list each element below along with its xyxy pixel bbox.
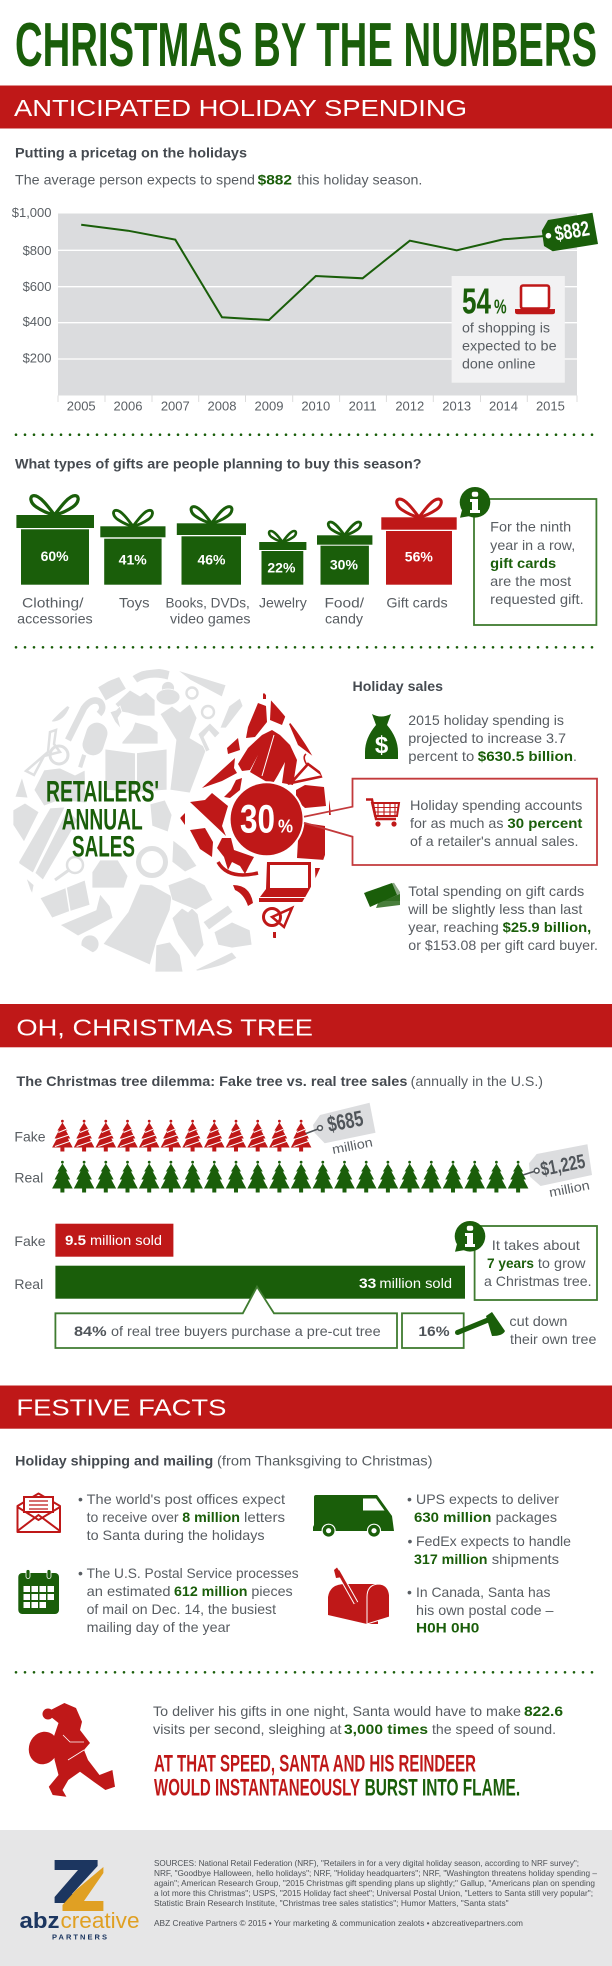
fact: USPS busiest day: mailing day of the year <box>87 1619 231 1635</box>
callout: gift cards most requested: For the ninth <box>490 519 571 535</box>
callout: gift cards most requested <box>460 487 596 625</box>
fact: holiday spending projection: 2015 holiday spending is <box>408 712 564 728</box>
gift: clothing 60%: 60% <box>41 548 69 564</box>
pictogram: fake tree sales: Fake <box>14 1128 46 1144</box>
logo: abz creative partners: abz <box>20 1908 60 1933</box>
gift labels: Toys <box>119 594 150 610</box>
fact: Santa's postal code: In Canada, Santa has <box>416 1584 550 1600</box>
price tag: $685 million: million <box>331 1134 374 1157</box>
fact: UPS and FedEx: 317 million <box>414 1551 488 1567</box>
section header: festive facts: FESTIVE FACTS <box>16 1394 226 1420</box>
gift: gift cards 56% <box>381 499 457 585</box>
subheading: gift types: What types of gifts are people planning to buy this season? <box>15 456 422 472</box>
callout: 7 years to grow <box>455 1221 597 1300</box>
subheading: tree dilemma: The Christmas tree dilemma: Fake tree vs. real tree sales <box>16 1074 407 1089</box>
callout: 7 years to grow: a Christmas tree. <box>484 1273 592 1289</box>
icon: shopping cart <box>366 800 399 827</box>
fact: letters to Santa: letters <box>244 1509 285 1525</box>
callout: 30 percent of annual sales <box>304 779 597 865</box>
gift labels: Food/ <box>324 594 364 610</box>
sources: NRF, "Goodbye Halloween, hello holidays"; NRF, "Holiday headquarters"; NRF, "Washington threatens holiday spending – <box>154 1868 597 1878</box>
sources: a lot more this Christmas"; USPS, "2015 Holiday fact sheet"; Universal Postal Union, "Letters to Santa still very popular"; <box>154 1888 593 1898</box>
callout: 54% online shopping <box>452 276 565 383</box>
callout: 84% pre-cut: of real tree buyers purchase a pre-cut tree <box>111 1323 381 1339</box>
fact: gift card spending <box>364 883 598 953</box>
section header: anticipated holiday spending <box>0 86 612 128</box>
y axis labels: $800 <box>23 243 52 258</box>
logo: abz creative partners: creative <box>60 1908 140 1933</box>
subheading: holiday shipping: Holiday shipping and mailing <box>15 1453 213 1468</box>
fact: letters to Santa: • <box>78 1491 83 1507</box>
icon: money bag: $ <box>375 732 389 759</box>
footer <box>0 1830 612 1966</box>
gift chart <box>16 496 457 626</box>
gift: clothing 60% <box>16 496 94 585</box>
gift labels: candy <box>325 610 363 626</box>
callout: 54% online shopping: % <box>494 296 507 318</box>
circle graphic: retailers' annual sales <box>13 668 331 974</box>
y axis labels: $1,000 <box>12 205 52 220</box>
x axis labels: 2012 <box>395 399 424 414</box>
bar: fake trees: Fake <box>14 1233 46 1249</box>
subheading: holiday sales: Holiday sales <box>352 679 443 694</box>
callout: gift cards most requested: requested gift. <box>490 591 584 607</box>
green trees <box>52 1161 528 1192</box>
heading: retailers' annual sales: SALES <box>72 831 135 864</box>
section header: oh, christmas tree <box>0 1004 612 1047</box>
gift: gift cards 56%: 56% <box>405 549 433 565</box>
30% badge: 30 <box>240 798 275 842</box>
x axis labels <box>67 399 565 414</box>
callout: 54% online shopping: 54 <box>462 280 491 321</box>
x axis labels: 2009 <box>255 399 283 414</box>
gift: jewelry 22%: 22% <box>267 560 296 576</box>
text: average spend <box>15 172 422 188</box>
gift: books 46% <box>177 507 246 585</box>
price tag: $882 <box>542 213 598 251</box>
icon: calendar <box>18 1570 59 1614</box>
sources <box>154 1858 597 1908</box>
bar: real trees: million sold <box>379 1275 452 1291</box>
icon: info bubble <box>460 487 490 518</box>
shoe <box>296 785 326 808</box>
subheading: pricetag: Putting a pricetag on the holidays <box>15 146 247 160</box>
gift: books 46%: 46% <box>197 552 226 568</box>
fact: USPS busiest day: The U.S. Postal Service processes <box>87 1565 299 1581</box>
callout: 16% cut down: cut down <box>509 1313 567 1329</box>
bar: fake trees: million sold <box>90 1232 162 1248</box>
sources: SOURCES: National Retail Federation (NRF), "Retailers in for a very digital holiday season, according to NRF survey"; <box>154 1858 579 1868</box>
rocking horse <box>217 838 254 874</box>
bar chart: trees sold <box>14 1224 597 1348</box>
bar: real trees <box>14 1266 465 1299</box>
fact: Santa's postal code: • <box>407 1584 412 1600</box>
pictogram: real tree sales <box>14 1144 592 1200</box>
fact: USPS busiest day: pieces <box>251 1583 293 1599</box>
30% badge <box>229 781 305 857</box>
red trees <box>52 1120 311 1152</box>
text: average spend: this holiday season. <box>297 172 422 188</box>
icon: laptop <box>515 286 555 314</box>
icon: gift cards <box>364 883 400 908</box>
spending line <box>81 225 545 320</box>
text: average spend: $882 <box>258 172 292 188</box>
subheading: holiday shipping: (from Thanksgiving to Christmas) <box>217 1452 432 1468</box>
fact: holiday spending projection <box>365 712 577 764</box>
fact: letters to Santa: to receive over <box>87 1509 179 1525</box>
fact: letters to Santa: to Santa during the holidays <box>87 1527 265 1543</box>
fact: holiday spending projection: projected to increase 3.7 <box>408 730 566 746</box>
fact: UPS and FedEx: • <box>408 1533 412 1549</box>
x axis labels: 2010 <box>301 399 330 414</box>
text: Santa's speed: 3,000 times <box>344 1721 428 1737</box>
gift labels: Jewelry <box>259 594 307 610</box>
callout: 7 years to grow: 7 years <box>487 1255 534 1271</box>
30% badge: % <box>278 817 293 837</box>
x axis labels: 2013 <box>442 399 471 414</box>
fact: USPS busiest day: 612 million <box>174 1583 248 1599</box>
text: Santa's speed: visits per second, sleighing at <box>153 1721 342 1737</box>
headline: burst into flame: WOULD INSTANTANEOUSLY <box>154 1775 360 1802</box>
fact: gift card spending: or $153.08 per gift card buyer. <box>408 937 598 953</box>
headline: burst into flame <box>154 1751 520 1802</box>
callout: 54% online shopping: of shopping is <box>462 320 550 336</box>
credit line: ABZ Creative Partners © 2015 • Your marketing & communication zealots • abzcreativepartners.com <box>154 1918 523 1928</box>
bar: real trees: Real <box>14 1276 43 1292</box>
price tag: $685 million: $685 <box>325 1105 365 1137</box>
section header: oh, christmas tree: OH, CHRISTMAS TREE <box>16 1014 313 1040</box>
bar: real trees: 33 <box>359 1275 377 1291</box>
subheading: holiday shipping <box>15 1452 432 1468</box>
callout: 16% cut down: 16% <box>418 1323 450 1339</box>
x axis labels: 2006 <box>114 399 142 414</box>
section header: festive facts <box>0 1386 612 1429</box>
gift labels: accessories <box>17 610 93 626</box>
gift labels <box>17 594 448 626</box>
icon: mailbox <box>328 1568 390 1624</box>
icon: envelope <box>18 1494 60 1532</box>
fact: UPS and FedEx: shipments <box>492 1551 559 1567</box>
x axis labels: 2014 <box>489 399 518 414</box>
gift labels: Gift cards <box>386 594 448 610</box>
jacket <box>238 730 297 785</box>
fact: Santa's postal code: his own postal code – <box>416 1602 554 1618</box>
fact: holiday spending projection: $630.5 billion <box>478 748 573 764</box>
y axis labels <box>12 205 52 366</box>
subheading: tree dilemma: (annually in the U.S.) <box>411 1073 543 1089</box>
fact: USPS busiest day: of mail on Dec. 14, the busiest <box>87 1601 276 1617</box>
text: Santa's speed: To deliver his gifts in one night, Santa would have to make <box>153 1703 521 1719</box>
gift labels: Books, DVDs, <box>166 594 250 610</box>
callout: 16% cut down <box>402 1312 597 1348</box>
icon: money bag <box>365 714 398 759</box>
fact: USPS busiest day: an estimated <box>87 1583 171 1599</box>
heading: retailers' annual sales: RETAILERS' <box>46 776 159 809</box>
y axis labels: $200 <box>23 350 52 366</box>
fact: Santa's postal code: H0H 0H0 <box>416 1620 480 1636</box>
gift: food 30% <box>317 522 372 585</box>
fact: UPS and FedEx: • <box>407 1491 412 1507</box>
laptop <box>260 862 312 897</box>
fact: letters to Santa <box>18 1491 285 1543</box>
fact: USPS busiest day: • <box>78 1565 83 1581</box>
fact: UPS and FedEx: 630 million <box>414 1509 491 1525</box>
callout: 30 percent of annual sales: of a retailer's annual sales. <box>410 833 578 849</box>
fact: UPS and FedEx: packages <box>496 1509 557 1525</box>
callout: 54% online shopping: expected to be <box>462 338 557 354</box>
bicycle <box>264 908 280 926</box>
hanger <box>291 764 324 783</box>
price tag: $685 million <box>306 1103 376 1157</box>
callout: 30 percent of annual sales: Holiday spending accounts <box>410 797 582 813</box>
red gift icons wedge <box>180 693 331 938</box>
subheading: tree dilemma <box>16 1073 543 1089</box>
price tag: $1,225 million <box>523 1144 592 1200</box>
gift labels: Clothing/ <box>22 594 84 610</box>
callout: 7 years to grow: It takes about <box>492 1237 580 1253</box>
x axis labels: 2008 <box>208 399 236 414</box>
callout: 84% pre-cut <box>55 1287 397 1348</box>
price tag: $1,225 million: $1,225 <box>539 1151 587 1181</box>
heading: retailers' annual sales: ANNUAL <box>62 803 143 836</box>
bar: fake trees <box>14 1224 173 1257</box>
fact: Santa's postal code <box>328 1568 554 1636</box>
fact: gift card spending: will be slightly less than last <box>407 901 582 917</box>
headline: burst into flame: BURST INTO FLAME. <box>365 1775 520 1802</box>
callout: 16% cut down: their own tree <box>510 1331 597 1347</box>
text: Santa's speed <box>153 1703 563 1737</box>
callout: gift cards most requested: gift cards <box>490 555 556 571</box>
icon: delivery truck <box>313 1495 394 1537</box>
gift: toys 41%: 41% <box>119 552 147 568</box>
fact: letters to Santa: 8 million <box>182 1509 240 1525</box>
gift: food 30%: 30% <box>330 557 358 573</box>
callout: 54% online shopping: done online <box>462 356 536 372</box>
icon: Santa silhouette <box>24 1703 115 1797</box>
text: Santa's speed: 822.6 <box>524 1703 563 1719</box>
callout: 84% pre-cut: 84% <box>74 1323 107 1339</box>
pictogram: fake tree sales <box>14 1103 376 1157</box>
callout: gift cards most requested: are the most <box>490 573 571 589</box>
heading: retailers' annual sales <box>46 776 159 864</box>
bar: fake trees: 9.5 <box>65 1232 86 1248</box>
callout: 30 percent of annual sales: for as much as <box>410 815 504 831</box>
text: Santa's speed: the speed of sound. <box>432 1721 556 1737</box>
fact: UPS and FedEx: UPS expects to deliver <box>416 1491 559 1507</box>
gray gift icons mosaic <box>13 668 252 974</box>
price tag: $882: $882 <box>553 217 591 246</box>
y axis labels: $400 <box>23 314 52 329</box>
gift: toys 41% <box>100 510 166 585</box>
x axis labels: 2015 <box>536 399 565 414</box>
sources: again"; American Research Group, "2015 Christmas gift spending plans up slightly;" Gallup, "Americans plan on spending <box>154 1878 595 1888</box>
pictogram: real tree sales: Real <box>14 1169 43 1185</box>
line chart: holiday spending 2005-2015 <box>12 205 598 414</box>
fact: letters to Santa: The world's post offices expect <box>87 1491 285 1507</box>
price tag: $1,225 million: million <box>548 1177 591 1200</box>
sources: Statistic Brain Research Institute, "Christmas tree sales statistics"; Humor Matters, "Santa stats" <box>154 1898 509 1908</box>
text: average spend: The average person expects to spend <box>15 172 255 188</box>
x axis labels: 2011 <box>349 399 377 414</box>
icon: axe <box>458 1312 505 1336</box>
callout: 30 percent of annual sales: 30 percent <box>507 815 583 831</box>
x axis labels: 2005 <box>67 399 96 414</box>
fact: gift card spending: $25.9 billion, <box>503 919 591 935</box>
fact: gift card spending: year, reaching <box>408 919 499 935</box>
fact: holiday spending projection: . <box>573 748 577 764</box>
fact: USPS busiest day <box>18 1565 299 1635</box>
section header: anticipated holiday spending: ANTICIPATED HOLIDAY SPENDING <box>14 95 467 121</box>
gift: jewelry 22% <box>259 531 306 585</box>
logo: abz creative partners: PARTNERS <box>52 1932 107 1942</box>
fact: holiday spending projection: percent to <box>408 748 475 764</box>
y axis labels: $600 <box>23 279 52 294</box>
callout: 7 years to grow: to grow <box>538 1255 586 1271</box>
callout: gift cards most requested: year in a row, <box>490 537 575 553</box>
hat <box>190 793 228 836</box>
fact: UPS and FedEx <box>313 1491 571 1567</box>
fact: gift card spending: Total spending on gift cards <box>408 883 584 899</box>
icon: info bubble <box>455 1221 485 1252</box>
logo: abz creative partners <box>20 1860 140 1942</box>
x axis labels: 2007 <box>161 399 190 414</box>
fact: UPS and FedEx: FedEx expects to handle <box>416 1533 571 1549</box>
gift labels: video games <box>170 610 250 626</box>
